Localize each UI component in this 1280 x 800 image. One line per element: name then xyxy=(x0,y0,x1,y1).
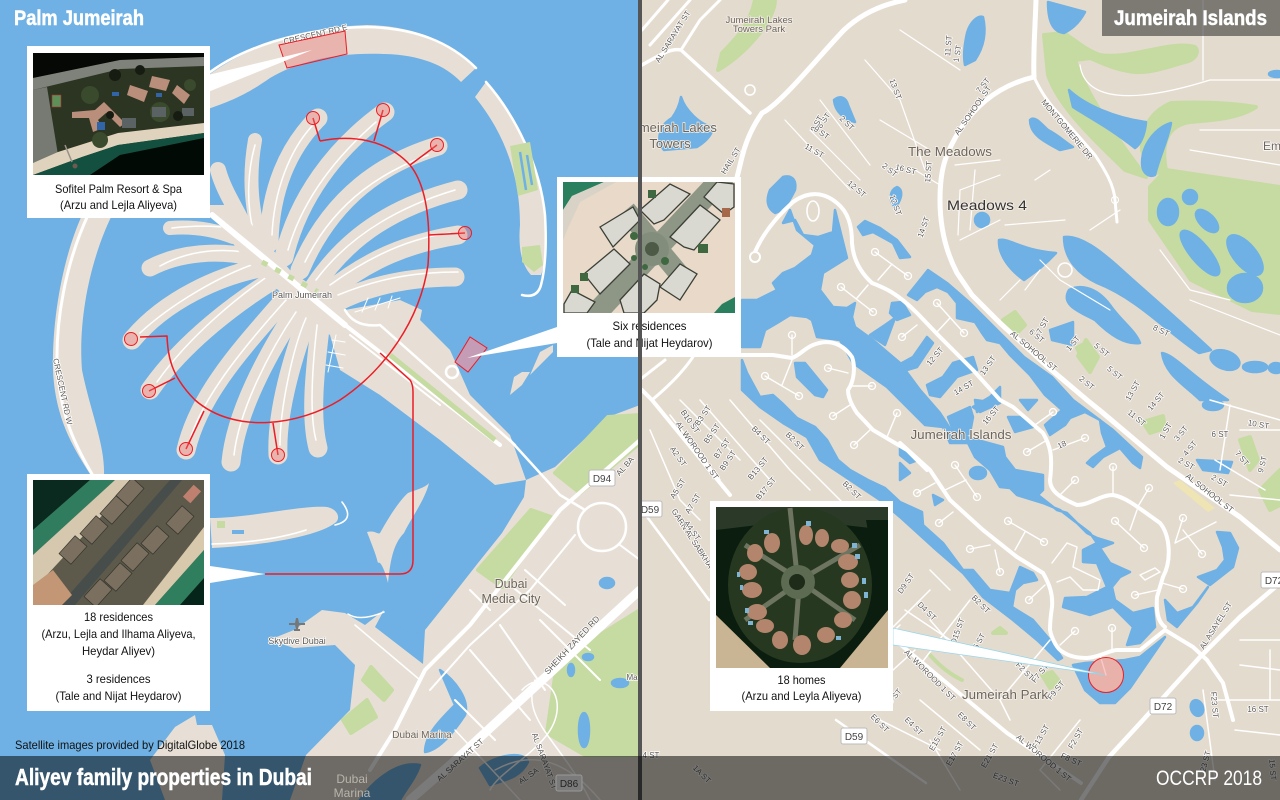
street labels: 7 ST xyxy=(1035,316,1051,335)
pointer: 18 residences xyxy=(210,566,265,583)
pointer: six residences xyxy=(467,327,557,358)
street labels: 9 ST xyxy=(812,124,831,142)
street labels: B2 ST xyxy=(841,479,863,501)
marker: 18 homes plot xyxy=(1088,658,1124,692)
street labels: E6 ST xyxy=(869,712,891,734)
place: Jumeirah Park: Jumeirah Park xyxy=(962,687,1049,702)
title: Aliyev family properties in Dubai xyxy=(15,764,312,790)
street labels: B17 ST xyxy=(754,475,778,502)
caption: Sofitel: (Arzu and Lejla Aliyeva) xyxy=(60,198,177,212)
photo: circular compound satellite xyxy=(716,507,888,668)
road shields: D72 xyxy=(1154,702,1173,713)
connector spokes xyxy=(149,110,465,455)
place: Jumeirah Islands: Jumeirah Islands xyxy=(910,427,1012,442)
street labels: F23 ST xyxy=(1209,691,1220,718)
road network xyxy=(642,0,1280,800)
street labels: 5 ST xyxy=(1105,364,1124,382)
place: Meadows 4: Meadows 4 xyxy=(947,197,1027,213)
lagoon: eastern rim channel xyxy=(908,270,1142,468)
road shields: D59 xyxy=(845,732,864,743)
street labels: E4 ST xyxy=(903,715,925,737)
street labels: 2 ST xyxy=(838,114,856,132)
street labels: 11 ST xyxy=(803,142,826,160)
street labels: B2 ST xyxy=(970,593,992,615)
shoreline labels and roads xyxy=(51,23,638,791)
caption: 18 residences: (Arzu, Lejla and Ilhama Aliyeva, xyxy=(42,627,196,641)
place: Dubai Marina: Dubai Marina xyxy=(392,730,452,741)
street labels: 18 xyxy=(1056,439,1068,451)
street labels: 1 ST xyxy=(1064,334,1082,353)
connector: route to 18 residences xyxy=(265,353,413,574)
caption: 18 residences: Heydar Aliyev) xyxy=(82,644,155,658)
street labels: 3 ST xyxy=(1172,424,1190,443)
street labels: 14 ST xyxy=(952,379,975,397)
street labels: AL WOROOD 1 ST xyxy=(1014,733,1073,784)
street labels: 16 ST xyxy=(1247,705,1269,714)
place: The Meadows: The Meadows xyxy=(908,144,993,159)
street labels: F2 ST xyxy=(1066,727,1085,750)
mainland coast xyxy=(150,405,640,800)
street labels: 14 ST xyxy=(916,215,932,239)
shoreline labels and roads: Ma xyxy=(626,673,638,682)
street labels: 1A ST xyxy=(691,763,713,785)
lagoon: Jumeirah Islands main water xyxy=(742,210,1155,645)
map: Palm Jumeirah xyxy=(0,0,640,800)
street labels: 12 ST xyxy=(925,345,945,367)
heading: Palm Jumeirah: Palm Jumeirah xyxy=(14,7,144,30)
street labels: 9 ST xyxy=(1256,455,1269,474)
red connector lines xyxy=(140,110,465,574)
street labels: 12 ST xyxy=(887,194,903,217)
street labels: HAIL ST xyxy=(719,146,743,176)
caption: 18 homes: (Arzu and Leyla Aliyeva) xyxy=(742,689,862,703)
road shields xyxy=(636,501,1280,744)
shoreline labels and roads: AL SA xyxy=(517,765,541,786)
place: Dubai Marina under footer xyxy=(334,772,371,800)
road shield: D94 xyxy=(589,470,615,486)
caption: six residences: Six residences xyxy=(612,319,686,333)
street labels: AL SOHOOL ST xyxy=(1184,472,1235,515)
street labels: 1 ST xyxy=(952,44,963,63)
street labels: AL WOROOD 1 ST xyxy=(674,420,720,481)
street labels: D9 ST xyxy=(896,572,916,595)
street labels: F7 ST xyxy=(1030,662,1051,685)
street labels: 8 ST xyxy=(1151,323,1171,338)
street labels: B13 ST xyxy=(746,455,770,482)
place: Jumeirah Lakes Towers Park: Jumeirah Lakes xyxy=(725,15,793,26)
shoreline labels and roads: Palm Jumeirah xyxy=(272,290,332,300)
panel: Sofitel Palm Resort xyxy=(27,46,210,218)
street labels: D4 ST xyxy=(916,600,938,623)
markers: residences on fronds xyxy=(124,104,472,462)
place: Dubai Media City xyxy=(481,577,541,606)
island loop roads xyxy=(753,194,1169,627)
smaller lagoons xyxy=(659,2,1280,740)
street labels: 16 ST xyxy=(981,404,1001,426)
street labels: B4 ST xyxy=(750,424,772,446)
street labels: 6 ST xyxy=(1027,327,1046,345)
street labels: 5 ST xyxy=(1092,341,1111,359)
street labels: 4 ST xyxy=(1181,439,1199,458)
caption: Sofitel: Sofitel Palm Resort & Spa xyxy=(55,182,182,196)
frond roads xyxy=(140,122,458,455)
road shields: D59 xyxy=(641,505,660,516)
street labels: 7 ST xyxy=(1233,449,1251,468)
street labels: 8 ST xyxy=(815,111,833,130)
pointer: 18 homes xyxy=(893,628,1105,675)
place: Dubai Marina under footer: Marina xyxy=(334,786,371,800)
street labels: B5 ST xyxy=(702,422,722,445)
street labels: GARN AL SABKHA xyxy=(670,507,715,571)
street labels: 15 ST xyxy=(1267,759,1278,781)
photo: resort satellite xyxy=(33,53,204,175)
street labels: A5 ST xyxy=(668,477,688,500)
caption: 18 residences xyxy=(42,610,196,703)
street labels: MONTGOMERIE DR xyxy=(1039,98,1095,161)
street labels: F9 ST xyxy=(1046,679,1067,702)
street labels: 15 ST xyxy=(923,161,934,183)
street labels: 7 ST xyxy=(974,76,992,95)
street labels: 11 ST xyxy=(943,35,954,57)
street labels: 2 ST xyxy=(1210,473,1229,489)
villa cul-de-sacs xyxy=(762,248,1206,634)
street labels: D15 ST xyxy=(949,617,967,645)
street labels: AL SOHOOL ST xyxy=(953,84,993,137)
crescent breakwater xyxy=(53,25,546,474)
mainland roads xyxy=(348,440,640,800)
street labels: 2 ST xyxy=(1177,456,1196,472)
place: Jumeirah Lakes Towers: Jumeirah Lakes xyxy=(625,120,717,135)
place: Jumeirah Lakes Towers Park: Towers Park xyxy=(733,24,785,35)
heading: Jumeirah Islands xyxy=(1102,0,1280,36)
street labels: A7 ST xyxy=(683,492,703,515)
golf course greens xyxy=(718,0,1280,688)
street labels: AL SARAYAT ST xyxy=(653,9,693,64)
street labels: AL ASAYEL ST xyxy=(1198,600,1234,651)
footer bar xyxy=(0,756,1280,800)
shoreline labels and roads: AL SARAYAT ST xyxy=(530,732,559,791)
street labels: A4 ST xyxy=(682,519,702,542)
divider between maps xyxy=(638,0,642,800)
street labels: B9 ST xyxy=(718,449,738,472)
caption: 18 residences: 3 residences xyxy=(86,672,150,686)
place: Dubai Marina under footer: Dubai xyxy=(336,772,368,786)
credit: satellite images: Satellite images provided by DigitalGlobe 2018 xyxy=(15,738,245,752)
street labels: B3 ST xyxy=(693,404,713,427)
callout pointers xyxy=(208,50,1105,675)
panel: 18 residences xyxy=(27,474,210,711)
street labels: AL WOROOD 1 ST xyxy=(902,648,957,703)
icon: Skydive Dubai airfield: Skydive Dubai xyxy=(268,636,326,646)
street labels: 6 ST xyxy=(1212,430,1229,439)
street labels: E23 ST xyxy=(992,771,1020,788)
street labels: D5 ST xyxy=(968,632,987,656)
street labels: 2 ST xyxy=(880,161,899,179)
caption: six residences xyxy=(586,319,712,350)
road shield: D94: D94 xyxy=(593,474,612,485)
caption: 18 homes xyxy=(742,673,862,703)
street labels: 1 ST xyxy=(1158,421,1174,440)
caption: 18 residences: 18 residences xyxy=(84,610,153,624)
street labels: 14 ST xyxy=(1146,390,1166,412)
street labels: 10 ST xyxy=(1247,418,1270,431)
pointer: Sofitel xyxy=(208,50,312,92)
street labels: 9 ST xyxy=(809,114,825,133)
shoreline labels and roads: CRESCENT RD E xyxy=(283,23,348,46)
street labels: B2 ST xyxy=(784,430,806,452)
place: Jumeirah Lakes Towers xyxy=(642,122,718,149)
marker: six residences plot xyxy=(455,337,487,372)
panel: Six residences xyxy=(557,175,741,357)
street labels: A2 ST xyxy=(668,445,688,468)
street labels: 16 ST xyxy=(894,162,917,177)
connector: arc linking Palm fronds xyxy=(140,138,429,423)
caption: 18 residences: (Tale and Nijat Heydarov) xyxy=(56,689,182,703)
place: Dubai Media City: Media City xyxy=(481,592,541,606)
street labels: E17 ST xyxy=(944,740,965,768)
street labels: 12 ST xyxy=(846,179,868,199)
marker: Sofitel Palm plot xyxy=(279,31,347,68)
map: Jumeirah Islands xyxy=(625,0,1280,800)
shoreline labels and roads: AL BA xyxy=(614,455,636,478)
panel: 18 homes xyxy=(710,501,893,711)
caption: six residences: (Tale and Nijat Heydarov) xyxy=(586,336,712,350)
street labels: 2 ST xyxy=(1077,374,1096,392)
street labels: 4 ST xyxy=(643,751,660,760)
place: Jumeirah Lakes Towers: Towers xyxy=(649,136,691,151)
street labels: E8 ST xyxy=(956,710,978,732)
icon: Skydive Dubai airfield xyxy=(268,618,326,646)
street labels xyxy=(643,9,1280,788)
street labels: F13 ST xyxy=(1030,723,1051,750)
place: Jumeirah Lakes Towers Park xyxy=(724,16,793,33)
palm fronds xyxy=(132,112,458,462)
lagoon: western rim channel xyxy=(742,360,1062,660)
street labels: 11 ST xyxy=(1126,408,1148,428)
road shield: D86 xyxy=(556,775,582,791)
street labels: B10 ST xyxy=(679,408,701,435)
road shield: D86: D86 xyxy=(560,779,579,790)
property markers xyxy=(124,31,1124,692)
caption: Sofitel xyxy=(55,182,182,212)
street labels: F8 ST xyxy=(1059,751,1083,768)
palm trunk and lower islands xyxy=(205,205,553,583)
street labels: E15 ST xyxy=(927,725,948,753)
shoreline labels and roads: CRESCENT RD W xyxy=(51,358,74,426)
street labels: 13 ST xyxy=(978,354,998,377)
street labels: E21 ST xyxy=(979,742,1000,770)
caption: 18 homes: 18 homes xyxy=(778,673,826,687)
place: Dubai Media City: Dubai xyxy=(495,577,527,591)
minor streets Meadows xyxy=(785,30,1120,310)
shoreline labels and roads: SHEIKH ZAYED RD xyxy=(542,614,602,676)
photo: six residences satellite xyxy=(563,182,735,313)
street labels: 23 ST xyxy=(1198,750,1213,773)
side streets in islands xyxy=(765,252,964,445)
photo: frond residences satellite xyxy=(33,478,204,607)
street labels: F2 ST xyxy=(1014,660,1036,682)
street labels: E9 ST xyxy=(882,687,904,710)
street labels: B7 ST xyxy=(712,437,732,460)
street labels: 13 ST xyxy=(887,78,903,101)
street labels: 13 ST xyxy=(1124,379,1142,402)
shoreline labels and roads: AL SARAYAT ST xyxy=(435,737,486,783)
street labels: AL SOHOOL ST xyxy=(1008,329,1059,373)
